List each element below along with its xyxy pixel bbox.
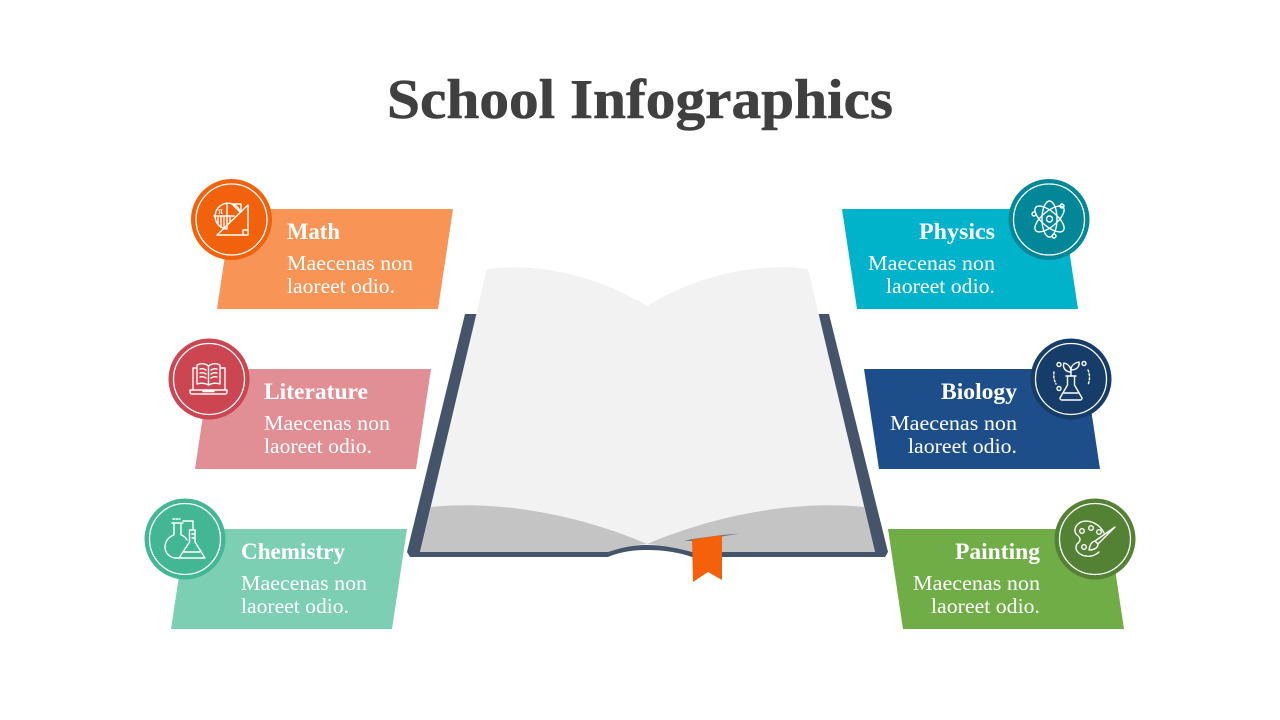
physics card	[842, 209, 1078, 309]
biology badge	[1030, 338, 1112, 420]
chemistry card	[171, 529, 407, 629]
panel: Physics	[842, 179, 1090, 309]
left page shadow	[420, 505, 647, 552]
physics description: Maecenas non	[868, 251, 995, 275]
panel: Biology	[864, 338, 1112, 469]
literature description: laoreet odio.	[264, 434, 372, 458]
biology description: Maecenas non	[890, 411, 1017, 435]
painting description	[913, 571, 1040, 618]
icon: flasks	[165, 519, 205, 558]
chemistry description	[241, 571, 367, 618]
bookmark fold	[684, 534, 740, 541]
biology description: laoreet odio.	[908, 434, 1017, 458]
math badge ring	[196, 184, 267, 255]
biology description	[890, 411, 1017, 458]
painting description: Maecenas non	[913, 571, 1040, 595]
math heading: Math	[287, 219, 340, 244]
physics description	[868, 251, 995, 298]
painting badge	[1054, 498, 1136, 580]
icon: plant in flask	[1054, 362, 1090, 400]
literature description: Maecenas non	[264, 411, 390, 435]
icon: atom	[1031, 201, 1068, 238]
math badge	[191, 179, 272, 260]
painting badge ring	[1060, 504, 1130, 574]
chemistry badge	[144, 498, 226, 580]
icon: laptop with book	[190, 364, 227, 394]
icon: geometry: π	[218, 206, 223, 216]
icon: geometry	[214, 203, 248, 235]
physics badge ring	[1014, 184, 1084, 255]
literature badge ring	[174, 344, 244, 414]
right page shadow	[647, 505, 875, 552]
math description	[287, 251, 413, 298]
chemistry heading: Chemistry	[241, 539, 345, 564]
open book	[407, 267, 888, 582]
math description: laoreet odio.	[287, 274, 395, 298]
icon: palette and brush	[1075, 521, 1115, 556]
physics description: laoreet odio.	[886, 274, 995, 298]
chemistry description: Maecenas non	[241, 571, 367, 595]
physics badge	[1008, 179, 1090, 260]
painting card	[888, 529, 1124, 629]
book cover	[407, 314, 888, 557]
painting heading: Painting	[955, 539, 1041, 564]
chemistry badge ring	[150, 504, 220, 574]
panel: Painting	[888, 498, 1136, 629]
biology badge ring	[1036, 344, 1106, 414]
book pages	[420, 267, 875, 552]
literature badge	[168, 338, 250, 420]
biology card	[864, 369, 1100, 469]
math description: Maecenas non	[287, 251, 413, 275]
literature description	[264, 411, 390, 458]
title: School Infographics	[387, 69, 893, 131]
panel: Literature	[168, 338, 431, 469]
panel: Chemistry	[144, 498, 407, 629]
bookmark	[692, 535, 722, 582]
painting description: laoreet odio.	[931, 594, 1040, 618]
chemistry description: laoreet odio.	[241, 594, 349, 618]
math card	[217, 209, 453, 309]
literature card	[195, 369, 431, 469]
panel: Math	[191, 179, 453, 309]
literature heading: Literature	[264, 379, 368, 404]
physics heading: Physics	[919, 219, 995, 244]
biology heading: Biology	[941, 379, 1018, 404]
